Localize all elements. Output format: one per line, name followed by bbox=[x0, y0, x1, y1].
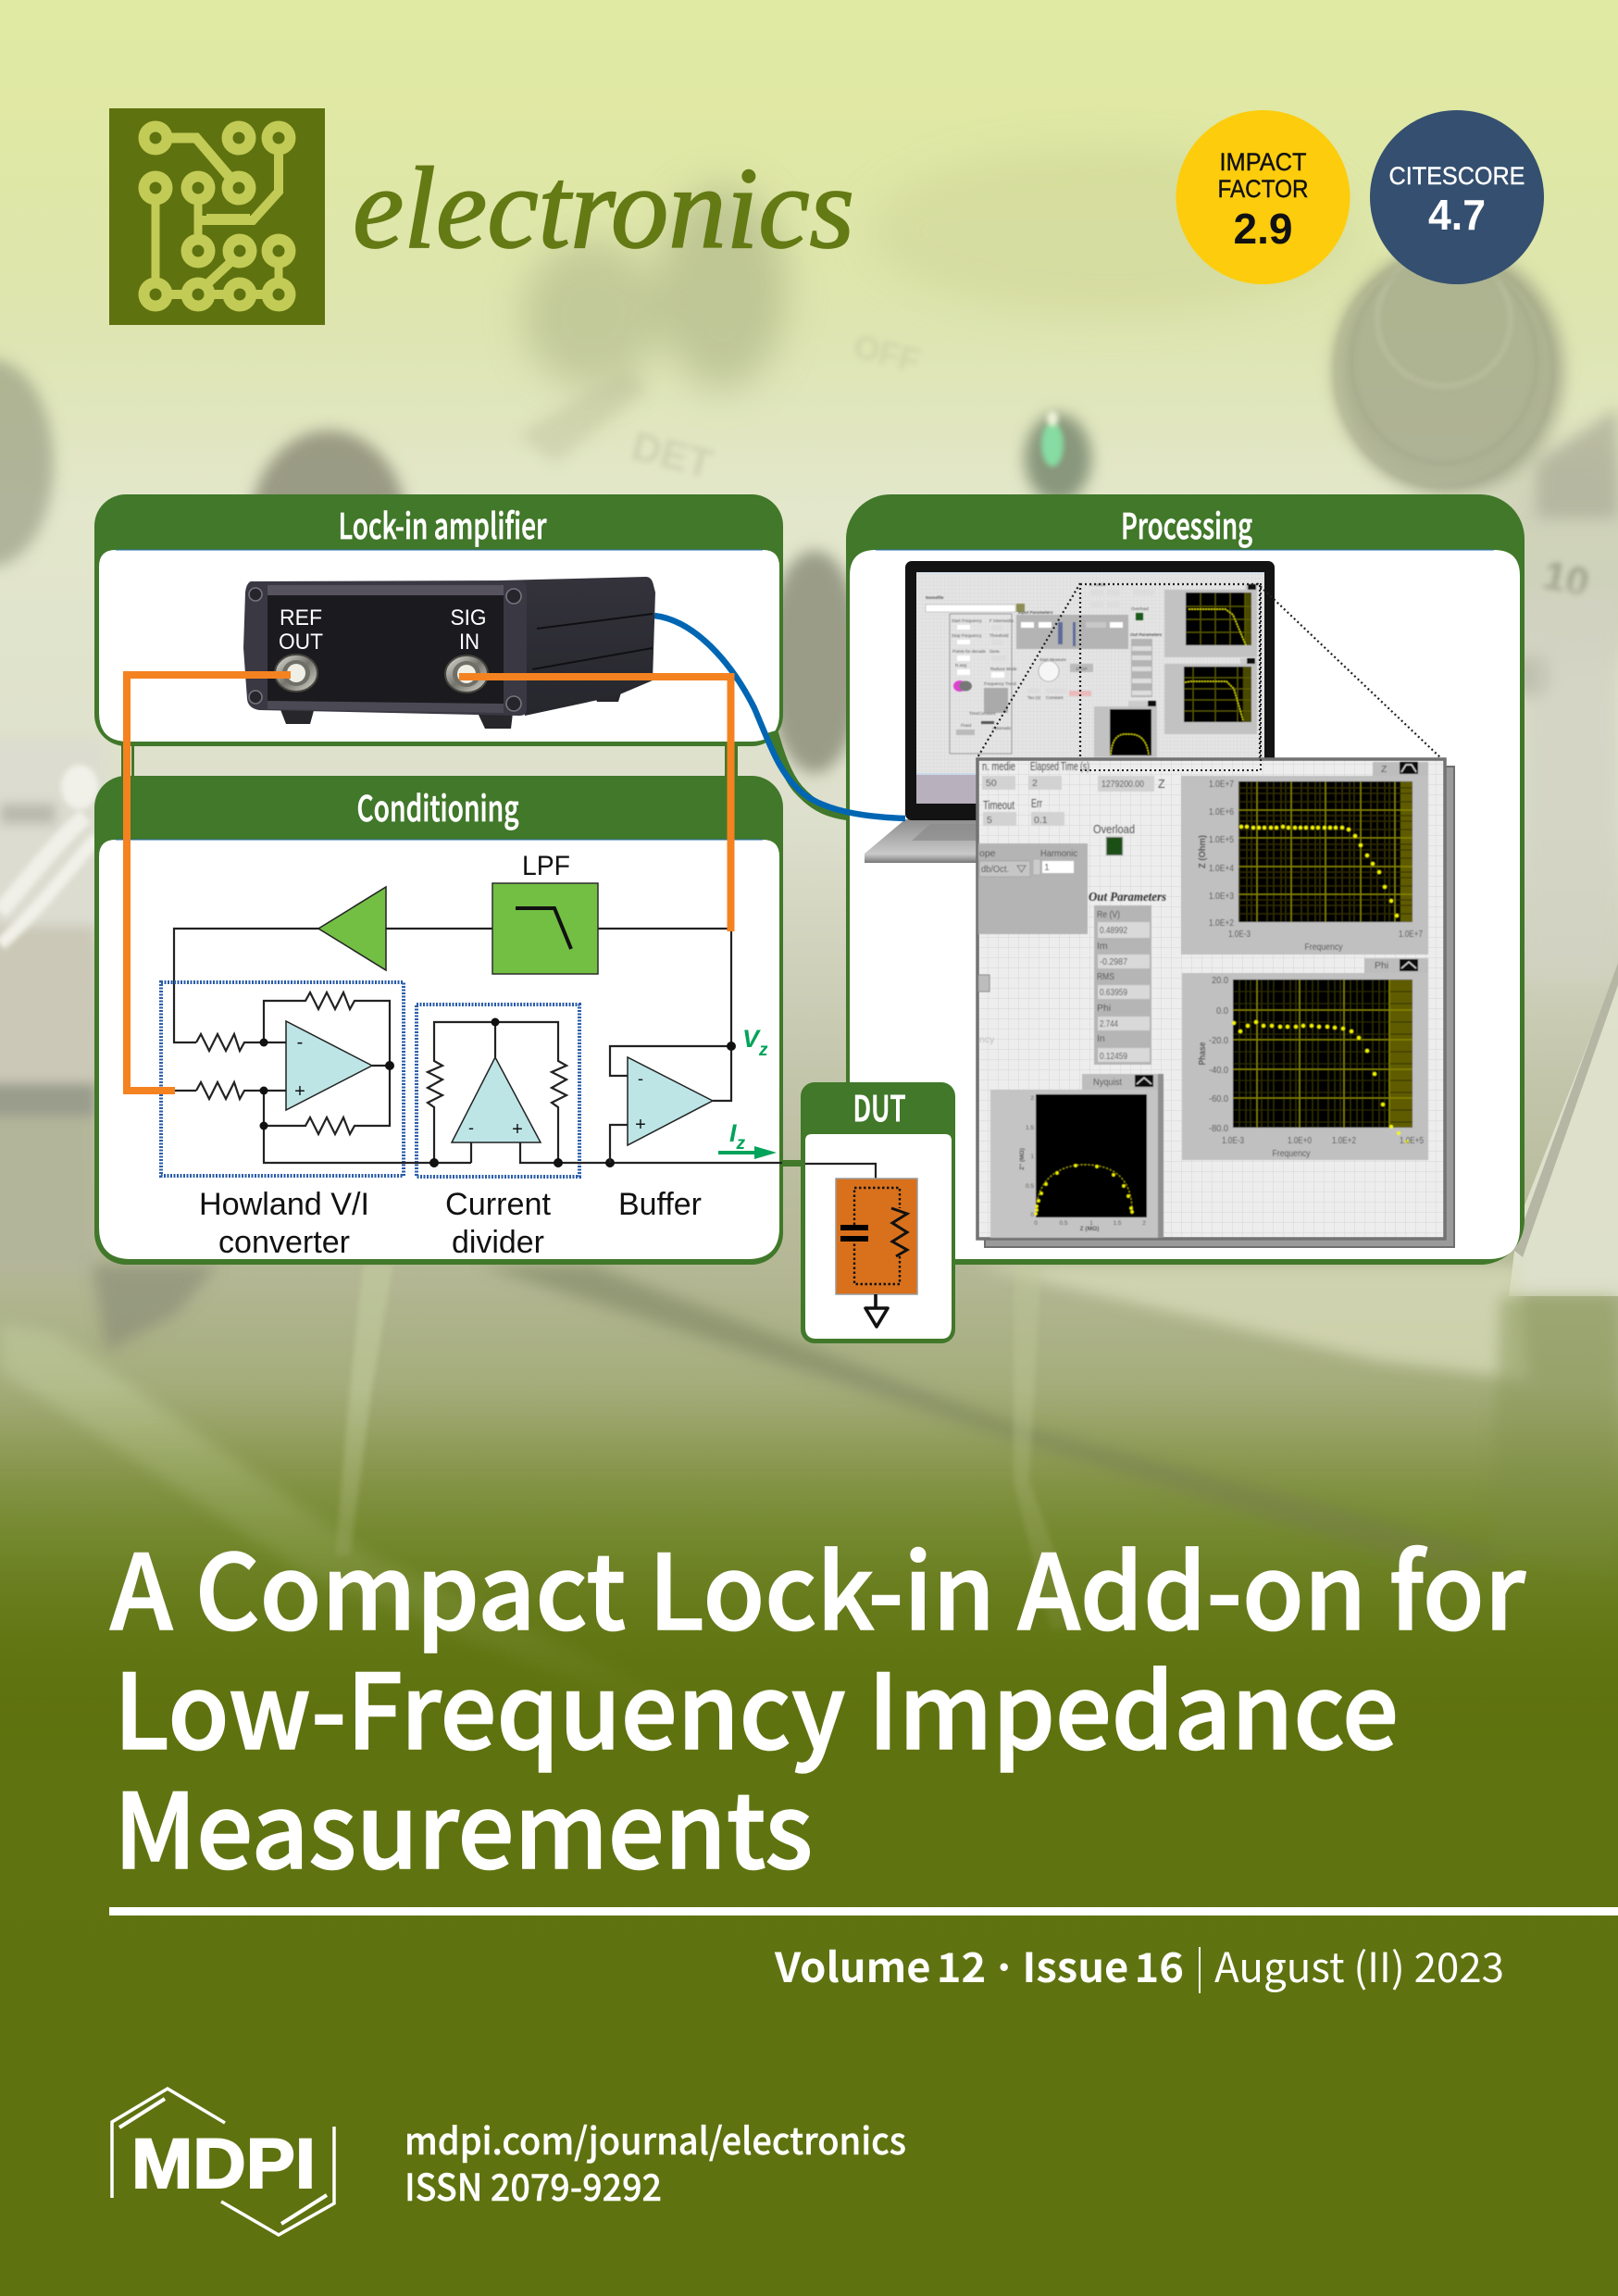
out parameters: 0.12459 bbox=[1100, 1051, 1127, 1062]
laptop screen: Reduce Mode bbox=[990, 667, 1017, 671]
zoom callout: dotted lines from laptop screen to enlarged window bbox=[977, 583, 1442, 768]
laptop base bbox=[865, 819, 990, 863]
top fields bbox=[982, 760, 1165, 836]
circuit schematic bbox=[161, 851, 802, 1260]
issue line: Volume 12 · Issue 16 bbox=[774, 1935, 1184, 1994]
blue signal cable to laptop bbox=[654, 616, 905, 818]
grey parameter panel: ope bbox=[979, 848, 996, 859]
label: Vz: z bbox=[758, 1041, 768, 1060]
chart: phase vs frequency bbox=[1182, 958, 1428, 1160]
current divider circuit: + bbox=[512, 1119, 523, 1140]
chart: nyquist plot: 2 bbox=[1030, 1095, 1034, 1102]
chart: nyquist plot: 0.5 bbox=[1059, 1220, 1068, 1227]
grey parameter panel bbox=[978, 843, 1088, 934]
panel: processing bbox=[846, 494, 1525, 1265]
enclosure side bbox=[500, 577, 655, 716]
label: sig in: SIG bbox=[450, 605, 487, 630]
laptop screen: Sens. bbox=[989, 649, 1001, 654]
out parameters: -0.2987 bbox=[1100, 956, 1127, 967]
panel: DUT bbox=[801, 1080, 955, 1343]
BNC connector: sig in bbox=[445, 655, 488, 693]
laptop screen: Out Parameters bbox=[1130, 632, 1163, 637]
title rule bbox=[109, 1907, 1618, 1915]
laptop screen: Frequency Trend bbox=[984, 681, 1016, 686]
label: sig in bbox=[450, 605, 487, 655]
chart: nyquist plot: Z'' (MΩ) bbox=[1019, 1148, 1026, 1170]
title: Low-Frequency Impedance bbox=[114, 1629, 1399, 1779]
top fields: 50 bbox=[986, 778, 997, 789]
chart: phase vs frequency: 20.0 bbox=[1212, 975, 1228, 986]
out parameters: Phi bbox=[1097, 1003, 1111, 1014]
MDPI logo: MDPI bbox=[131, 2125, 316, 2203]
chart: impedance magnitude Z vs frequency: 1.0E+4 bbox=[1209, 863, 1234, 874]
laptop screen: Stop Frequency bbox=[952, 633, 982, 638]
enlarged software window: ncy bbox=[979, 1034, 995, 1045]
lower diagonal bands bbox=[0, 1265, 1618, 1713]
journal url and ISSN: mdpi.com/journal/electronics bbox=[404, 2112, 906, 2165]
ground symbol bbox=[865, 1294, 888, 1327]
label: ref out: OUT bbox=[279, 630, 323, 655]
chart: impedance magnitude Z vs frequency: Frequency bbox=[1305, 942, 1343, 953]
panel: conditioning bbox=[94, 776, 783, 1265]
label: ref out: REF bbox=[280, 605, 322, 630]
journal url and ISSN bbox=[404, 2112, 906, 2212]
laptop screen: Start Frequency bbox=[952, 618, 982, 623]
chart: phase vs frequency: 1.0E+0 bbox=[1288, 1135, 1312, 1146]
howland V/I converter circuit bbox=[196, 992, 471, 1163]
laptop screen: Automatic bbox=[992, 726, 1012, 730]
heading: DUT: DUT bbox=[853, 1080, 905, 1131]
heading: processing: Processing bbox=[1121, 498, 1252, 549]
badge: impact factor: IMPACT bbox=[1220, 148, 1307, 176]
top fields: 0.1 bbox=[1034, 815, 1048, 826]
MDPI logo bbox=[112, 2089, 334, 2235]
chart: impedance magnitude Z vs frequency: 1.0E+7 bbox=[1399, 929, 1423, 940]
label: Iz with arrow: I bbox=[729, 1119, 737, 1147]
lock-in amplifier device bbox=[243, 577, 655, 729]
buffer circuit: + bbox=[635, 1115, 646, 1135]
chart: impedance magnitude Z vs frequency: 1.0E+6 bbox=[1209, 806, 1234, 817]
enlarged software window bbox=[977, 583, 1454, 1247]
chart: phase vs frequency: -20.0 bbox=[1209, 1035, 1228, 1046]
LPF label: LPF bbox=[522, 851, 570, 881]
laptop screen: Start Measure bbox=[1039, 657, 1066, 662]
chart: phase vs frequency: 1.0E-3 bbox=[1222, 1135, 1244, 1146]
laptop screen: Threshold bbox=[989, 633, 1009, 638]
laptop screen: N avg bbox=[955, 663, 966, 668]
laptop screen bbox=[916, 572, 1264, 804]
dotted box: howland bbox=[161, 982, 404, 1176]
out parameters bbox=[1089, 890, 1166, 1065]
chart: impedance magnitude Z vs frequency: 1.0E-3 bbox=[1228, 929, 1251, 940]
feet bbox=[280, 690, 622, 729]
top fields: Elapsed Time (s) bbox=[1030, 760, 1089, 773]
laptop screen: Tau (s) bbox=[1027, 695, 1041, 700]
out parameters: Im bbox=[1097, 941, 1108, 952]
out parameters: Out Parameters bbox=[1089, 890, 1166, 904]
chart: nyquist plot: 1.5 bbox=[1026, 1125, 1034, 1131]
current divider circuit bbox=[428, 1018, 802, 1167]
top fields: 1279200.00 bbox=[1101, 779, 1144, 790]
chart: impedance magnitude Z vs frequency: Z (Ohm) bbox=[1197, 835, 1208, 868]
low-pass filter block bbox=[492, 883, 598, 974]
buffer circuit: - bbox=[638, 1069, 643, 1088]
laptop screen: Input Parameters bbox=[1018, 610, 1053, 615]
chart: phase vs frequency: 1.0E+2 bbox=[1332, 1135, 1356, 1146]
laptop screen: STOP bbox=[1076, 667, 1088, 671]
journal url and ISSN: ISSN 2079-9292 bbox=[404, 2158, 662, 2212]
orange reference and signal wires bbox=[127, 675, 731, 1091]
device under test block bbox=[836, 1179, 917, 1294]
green connector from conditioning panel to DUT bbox=[782, 1160, 803, 1167]
chart: impedance magnitude Z vs frequency: 1.0E+7 bbox=[1209, 779, 1234, 790]
badge: impact factor: FACTOR bbox=[1218, 175, 1309, 203]
laptop screen: Fixed bbox=[961, 723, 972, 728]
howland V/I converter circuit: + bbox=[294, 1081, 305, 1102]
top fields: Err bbox=[1031, 797, 1042, 810]
label: Iz with arrow bbox=[718, 1119, 777, 1159]
black front panel bbox=[268, 595, 504, 704]
top fields: n. medie bbox=[982, 760, 1015, 773]
top fields: 2 bbox=[1032, 778, 1038, 789]
label: Iz with arrow: z bbox=[736, 1134, 746, 1154]
out parameters: 0.63959 bbox=[1100, 987, 1127, 998]
laptop with front-panel software bbox=[865, 561, 1275, 863]
issue line: August (II) 2023 bbox=[1214, 1935, 1504, 1994]
chart: impedance magnitude Z vs frequency: 1.0E+2 bbox=[1209, 917, 1234, 929]
chart: phase vs frequency: Phi bbox=[1375, 960, 1388, 971]
logo: electronics circuit mark bbox=[109, 108, 325, 325]
chart: phase vs frequency: 0.0 bbox=[1216, 1005, 1228, 1017]
chart: phase vs frequency: -60.0 bbox=[1209, 1093, 1228, 1104]
laptop screen: Constant bbox=[1046, 695, 1064, 700]
laptop bezel bbox=[905, 561, 1275, 820]
laptop screen: TimeConstant bbox=[969, 711, 996, 716]
out parameters: 2.744 bbox=[1100, 1018, 1118, 1029]
right strip bbox=[1524, 593, 1618, 981]
front frame bbox=[243, 580, 527, 716]
out parameters: 0.48992 bbox=[1100, 925, 1127, 936]
label: howland V/I converter: Howland V/I bbox=[199, 1187, 369, 1222]
out parameters: In bbox=[1097, 1033, 1105, 1044]
chart: phase vs frequency: -40.0 bbox=[1209, 1065, 1228, 1076]
badge: impact factor bbox=[1176, 110, 1350, 284]
label: howland V/I converter: converter bbox=[218, 1225, 350, 1260]
photo lettering on the instrument: OFF bbox=[850, 327, 924, 380]
photo lettering on the instrument bbox=[628, 327, 1593, 606]
screws bbox=[249, 588, 521, 711]
panel: lock-in amplifier bbox=[94, 494, 783, 746]
chart: nyquist plot: 1 bbox=[1089, 1220, 1093, 1227]
badge: impact factor: 2.9 bbox=[1233, 205, 1292, 253]
label: current divider: divider bbox=[452, 1225, 544, 1260]
laptop screen: Points for decade bbox=[952, 649, 986, 654]
title: A Compact Lock-in Add-on for bbox=[110, 1510, 1526, 1660]
label: sig in: IN bbox=[459, 630, 479, 655]
chart: nyquist plot: Nyquist bbox=[1093, 1077, 1122, 1088]
photo lettering on the instrument: 10 bbox=[1539, 553, 1593, 606]
left cables bbox=[0, 741, 102, 1274]
heading: lock-in amplifier: Lock-in amplifier bbox=[339, 498, 547, 549]
label: current divider: Current bbox=[445, 1187, 552, 1222]
current divider circuit: - bbox=[468, 1118, 474, 1137]
label: Vz: V bbox=[742, 1025, 759, 1053]
chart: nyquist plot bbox=[990, 1074, 1164, 1238]
top fields: 5 bbox=[987, 815, 992, 826]
laptop screen: Nomefile bbox=[926, 595, 944, 600]
chart: phase vs frequency: Phase bbox=[1197, 1042, 1208, 1065]
buffer circuit bbox=[610, 1042, 736, 1163]
journal name: electronics bbox=[353, 144, 854, 273]
chart: nyquist plot: 2 bbox=[1142, 1220, 1146, 1227]
title: Measurements bbox=[114, 1749, 813, 1899]
chart: nyquist plot: 1.5 bbox=[1113, 1220, 1122, 1227]
out parameters: Re (V) bbox=[1097, 909, 1120, 920]
top fields: Z bbox=[1158, 778, 1165, 791]
chart: impedance magnitude Z vs frequency: 1.0E+5 bbox=[1209, 834, 1234, 845]
grey parameter panel: 1 bbox=[1044, 862, 1050, 873]
howland V/I converter circuit: - bbox=[297, 1032, 303, 1053]
chart: nyquist plot: Z (MΩ) bbox=[1080, 1226, 1099, 1232]
badge: citescore: CITESCORE bbox=[1388, 162, 1525, 190]
chart: nyquist plot: 0.5 bbox=[1026, 1183, 1034, 1190]
grey parameter panel: Harmonic bbox=[1040, 848, 1077, 859]
out parameters: RMS bbox=[1097, 971, 1114, 982]
label: ref out bbox=[279, 605, 323, 655]
connector strips between lock-in and conditioning panels bbox=[121, 741, 738, 782]
photo lettering on the instrument: DET bbox=[628, 423, 717, 487]
laptop screen: n. medie bbox=[1089, 582, 1106, 587]
chart: nyquist plot: 0 bbox=[1030, 1212, 1034, 1218]
chart: nyquist plot: 0 bbox=[1034, 1220, 1038, 1227]
overload LED bbox=[1106, 837, 1123, 855]
dotted box: current divider bbox=[417, 1004, 579, 1177]
laptop screen: Overload bbox=[1131, 606, 1149, 611]
chart: impedance magnitude Z vs frequency: Z bbox=[1381, 764, 1388, 775]
chart: impedance magnitude Z vs frequency bbox=[1181, 762, 1428, 955]
heading: conditioning: Conditioning bbox=[357, 780, 519, 831]
feedback wire bbox=[174, 929, 731, 1101]
chart: phase vs frequency: Frequency bbox=[1272, 1148, 1311, 1159]
chart: nyquist plot: 1 bbox=[1030, 1154, 1034, 1160]
chart: phase vs frequency: -80.0 bbox=[1209, 1123, 1228, 1134]
badge: citescore bbox=[1370, 110, 1544, 284]
BNC connector: ref out bbox=[275, 655, 317, 692]
gain triangle bbox=[318, 887, 386, 970]
laptop screen: F Intermedia bbox=[989, 618, 1014, 623]
badge: citescore: 4.7 bbox=[1428, 191, 1486, 239]
chart: impedance magnitude Z vs frequency: 1.0E+3 bbox=[1209, 891, 1234, 902]
top fields: Overload bbox=[1093, 823, 1135, 836]
grey parameter panel: db/Oct. bbox=[981, 864, 1009, 875]
label: buffer: Buffer bbox=[618, 1187, 702, 1222]
top fields: Timeout bbox=[983, 799, 1014, 812]
wire into device under test bbox=[805, 1164, 876, 1179]
chart: phase vs frequency: 1.0E+5 bbox=[1400, 1135, 1424, 1146]
issue line bbox=[774, 1935, 1504, 1994]
